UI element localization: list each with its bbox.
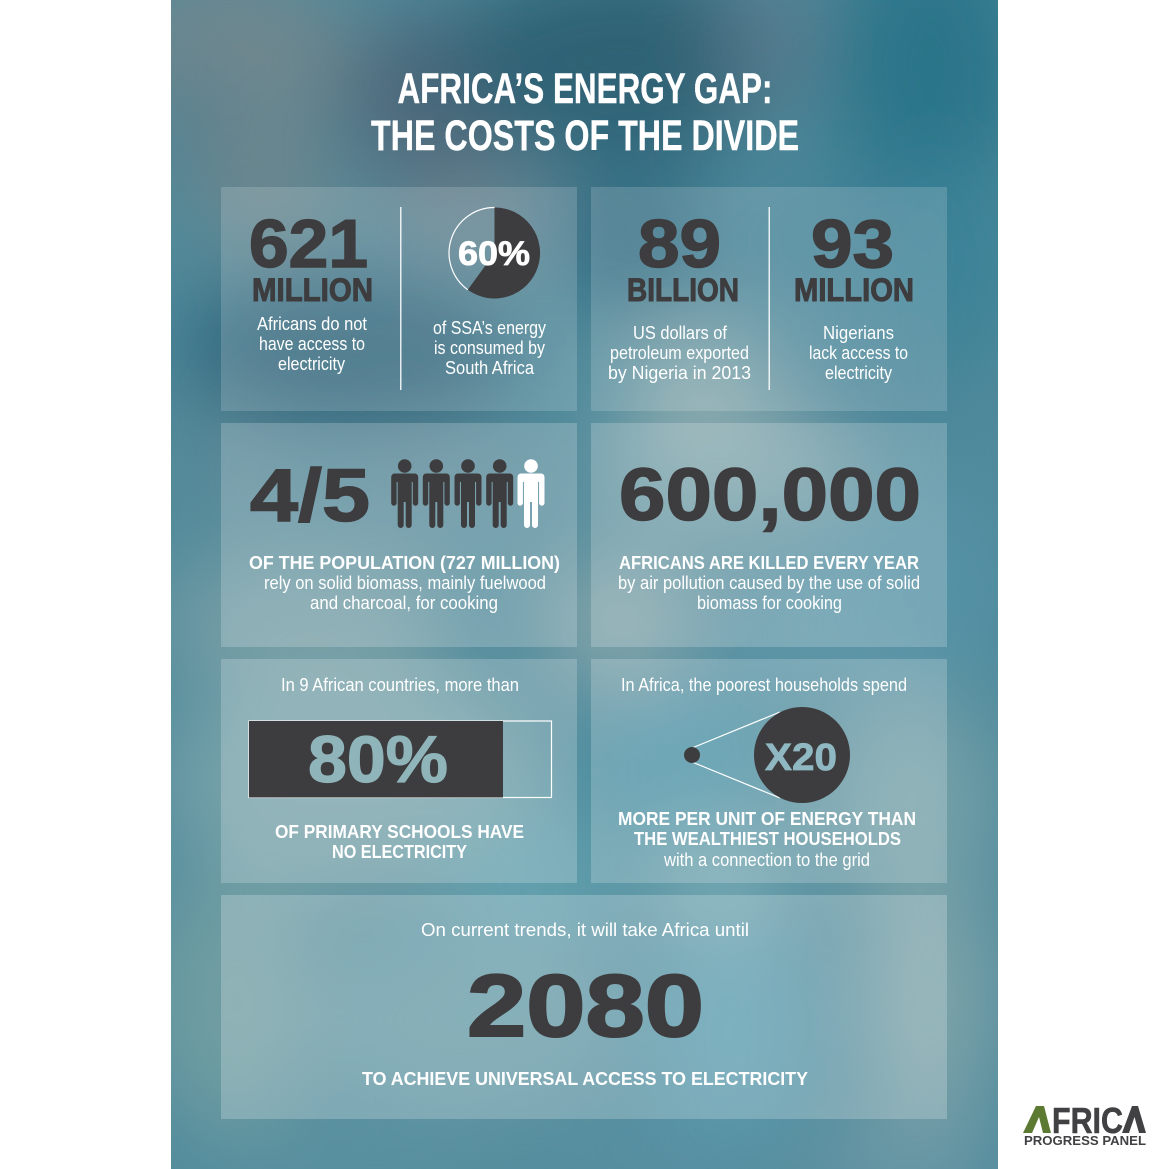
- stat: 93 million: MILLION: [794, 272, 914, 308]
- logo: Africa Progress Panel: [1023, 1100, 1146, 1148]
- stat text: SSA energy: is consumed by: [434, 338, 545, 358]
- stat: 621 million: [249, 206, 373, 374]
- stat: 93 million: 93: [811, 206, 894, 282]
- panel: 4/5 of the population: [221, 423, 577, 647]
- text: unit of energy: with a connection to the grid: [663, 850, 870, 870]
- stat text: SSA energy: of SSA’s energy: [433, 318, 546, 338]
- stat: 621 million: Africans do not: [257, 314, 367, 334]
- stat: 93 million: electricity: [825, 363, 892, 383]
- text: universal access: TO ACHIEVE UNIVERSAL ACCESS TO ELECTRICITY: [362, 1069, 808, 1089]
- text: biomass: OF THE POPULATION (727 MILLION): [249, 553, 560, 573]
- progress bar: 80 percent: 80%: [308, 722, 448, 796]
- pie chart: 60 percent: [449, 207, 540, 298]
- title: [371, 65, 799, 160]
- text: air pollution: AFRICANS ARE KILLED EVERY YEAR: [619, 553, 919, 573]
- stat: 2080: 2080: [467, 956, 704, 1055]
- stat: 93 million: lack access to: [809, 343, 908, 363]
- icon: green A: [1023, 1106, 1051, 1133]
- stat: 89 billion: by Nigeria in 2013: [608, 363, 751, 383]
- icon: five people: [391, 459, 544, 528]
- text: unit of energy: MORE PER UNIT OF ENERGY THAN: [618, 809, 916, 829]
- text: unit of energy: [618, 809, 916, 870]
- panel: 621 million and 60 percent: [221, 187, 577, 411]
- panel: 89 billion and 93 million: [591, 187, 947, 411]
- logo: Africa Progress Panel: PROGRESS PANEL: [1024, 1134, 1146, 1148]
- stat: 89 billion: [608, 206, 751, 383]
- stat: 89 billion: petroleum exported: [610, 343, 749, 363]
- panel: 2080: [221, 895, 947, 1119]
- stat: 621 million: MILLION: [252, 272, 373, 308]
- title: THE COSTS OF THE DIVIDE: [371, 112, 799, 160]
- text: intro: In 9 African countries, more than: [281, 675, 519, 695]
- panel: 80 percent of schools: [221, 659, 577, 883]
- text: air pollution: biomass for cooking: [697, 593, 842, 613]
- text: intro: In Africa, the poorest households spend: [621, 675, 907, 695]
- stat: 600,000: 600,000: [619, 453, 921, 536]
- stat text: SSA energy: [433, 318, 546, 378]
- panel: 600,000: [591, 423, 947, 647]
- stat text: SSA energy: South Africa: [445, 358, 535, 378]
- text: air pollution: [618, 553, 920, 613]
- title: AFRICA’S ENERGY GAP:: [398, 65, 772, 113]
- background: blurred teal poster: [171, 0, 998, 1169]
- text: biomass: and charcoal, for cooking: [310, 593, 498, 613]
- panel: X20 households: [591, 659, 947, 883]
- stat: 89 billion: BILLION: [627, 272, 739, 308]
- text: biomass: rely on solid biomass, mainly fuelwood: [264, 573, 546, 593]
- text: primary schools: NO ELECTRICITY: [332, 842, 467, 862]
- pie chart: 60 percent: 60%: [458, 235, 530, 273]
- stat: 93 million: [794, 206, 914, 383]
- stat: 4/5: 4/5: [250, 454, 370, 537]
- stat: 89 billion: 89: [638, 206, 721, 282]
- stat: 89 billion: US dollars of: [633, 323, 728, 343]
- diagram: X20 circles: [684, 707, 850, 803]
- text: unit of energy: THE WEALTHIEST HOUSEHOLDS: [634, 829, 901, 849]
- progress bar: 80 percent: [249, 721, 552, 798]
- text: air pollution: by air pollution caused by the use of solid: [618, 573, 920, 593]
- logo: Africa Progress Panel: FRIC: [1052, 1100, 1123, 1141]
- text: primary schools: OF PRIMARY SCHOOLS HAVE: [275, 822, 524, 842]
- text: biomass: [249, 553, 560, 613]
- stat: 621 million: electricity: [278, 354, 345, 374]
- text: primary schools: [275, 822, 524, 862]
- stat: 621 million: have access to: [259, 334, 365, 354]
- diagram: X20 circles: X20: [765, 737, 837, 779]
- text: current trends: On current trends, it will take Africa until: [421, 920, 749, 940]
- stat: 93 million: Nigerians: [823, 323, 894, 343]
- stat: 621 million: 621: [249, 206, 368, 282]
